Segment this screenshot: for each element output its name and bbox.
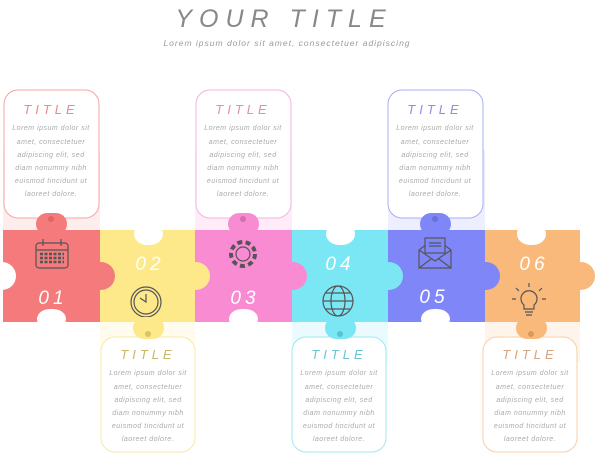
panel: box 2: TITLE bbox=[120, 347, 176, 362]
icon: gear bbox=[231, 242, 255, 266]
tabs bbox=[36, 213, 547, 339]
panel: box 2: amet, consectetuer bbox=[114, 384, 182, 391]
panel: box 3: amet, consectetuer bbox=[209, 139, 277, 146]
panel: box 4: euismod tincidunt ut bbox=[303, 423, 376, 430]
panel: box 3: TITLE bbox=[215, 102, 271, 117]
panel: box 5: Lorem ipsum dolor sit bbox=[396, 125, 474, 132]
panel: box 6: amet, consectetuer bbox=[496, 384, 564, 391]
panel: box 2: euismod tincidunt ut bbox=[112, 423, 185, 430]
panel: box 4: amet, consectetuer bbox=[305, 384, 373, 391]
panel: box 4: laoreet dolore. bbox=[313, 436, 365, 443]
panel: box 4: adipiscing elit, sed bbox=[305, 397, 373, 404]
panel: box 4: diam nonummy nibh bbox=[303, 410, 375, 417]
panel: box 6: euismod tincidunt ut bbox=[494, 423, 567, 430]
panel: box 6 bbox=[483, 337, 577, 452]
numbers: 01 bbox=[38, 288, 68, 309]
panel: box 5: laoreet dolore. bbox=[409, 191, 461, 198]
panel: box 2: diam nonummy nibh bbox=[112, 410, 184, 417]
panel: box 1: Lorem ipsum dolor sit bbox=[12, 125, 90, 132]
panel: box 1: amet, consectetuer bbox=[17, 139, 85, 146]
numbers: 02 bbox=[135, 254, 165, 275]
panel: box 6: TITLE bbox=[502, 347, 558, 362]
panel: box 1: adipiscing elit, sed bbox=[17, 152, 85, 159]
panel: box 2: Lorem ipsum dolor sit bbox=[109, 370, 187, 377]
subtitle: Lorem ipsum dolor sit amet, consectetuer adipiscing bbox=[163, 38, 411, 48]
numbers: 04 bbox=[325, 254, 355, 275]
panel: box 3: Lorem ipsum dolor sit bbox=[204, 125, 282, 132]
panel: box 6: laoreet dolore. bbox=[504, 436, 556, 443]
panel: box 5 bbox=[388, 90, 483, 218]
panel: box 3: euismod tincidunt ut bbox=[207, 178, 280, 185]
panel: box 1: diam nonummy nibh bbox=[15, 165, 87, 172]
icon: bulb bbox=[512, 283, 546, 315]
panel: box 3 bbox=[196, 90, 291, 218]
puzzle band bbox=[0, 223, 595, 329]
panel: box 2 bbox=[101, 337, 195, 452]
panel: box 1 bbox=[4, 90, 99, 218]
panel: box 6: diam nonummy nibh bbox=[494, 410, 566, 417]
panel: box 5: adipiscing elit, sed bbox=[401, 152, 469, 159]
panel: box 1: laoreet dolore. bbox=[25, 191, 77, 198]
panel: box 3: adipiscing elit, sed bbox=[209, 152, 277, 159]
panel: box 5: amet, consectetuer bbox=[401, 139, 469, 146]
panel: box 4: Lorem ipsum dolor sit bbox=[300, 370, 378, 377]
panel: box 5: euismod tincidunt ut bbox=[399, 178, 472, 185]
panel: box 2: adipiscing elit, sed bbox=[114, 397, 182, 404]
panel: box 5: TITLE bbox=[407, 102, 463, 117]
panel: box 4: TITLE bbox=[311, 347, 367, 362]
icon: clock bbox=[131, 287, 161, 317]
panel: box 1: TITLE bbox=[23, 102, 79, 117]
panel: box 2: laoreet dolore. bbox=[122, 436, 174, 443]
title: YOUR TITLE bbox=[175, 5, 393, 33]
panel: box 4 bbox=[292, 337, 386, 452]
translucent columns bbox=[3, 150, 580, 362]
numbers: 03 bbox=[230, 288, 260, 309]
panel: box 6: Lorem ipsum dolor sit bbox=[491, 370, 569, 377]
numbers: 05 bbox=[419, 287, 449, 308]
panel: box 1: euismod tincidunt ut bbox=[15, 178, 88, 185]
icon: envelope bbox=[419, 238, 451, 268]
panel: box 6: adipiscing elit, sed bbox=[496, 397, 564, 404]
panel: box 3: laoreet dolore. bbox=[217, 191, 269, 198]
panel: box 3: diam nonummy nibh bbox=[207, 165, 279, 172]
icon: globe bbox=[323, 286, 353, 316]
icon: calendar bbox=[36, 239, 68, 268]
panel: box 5: diam nonummy nibh bbox=[399, 165, 471, 172]
numbers: 06 bbox=[519, 254, 549, 275]
numbers bbox=[38, 254, 549, 309]
